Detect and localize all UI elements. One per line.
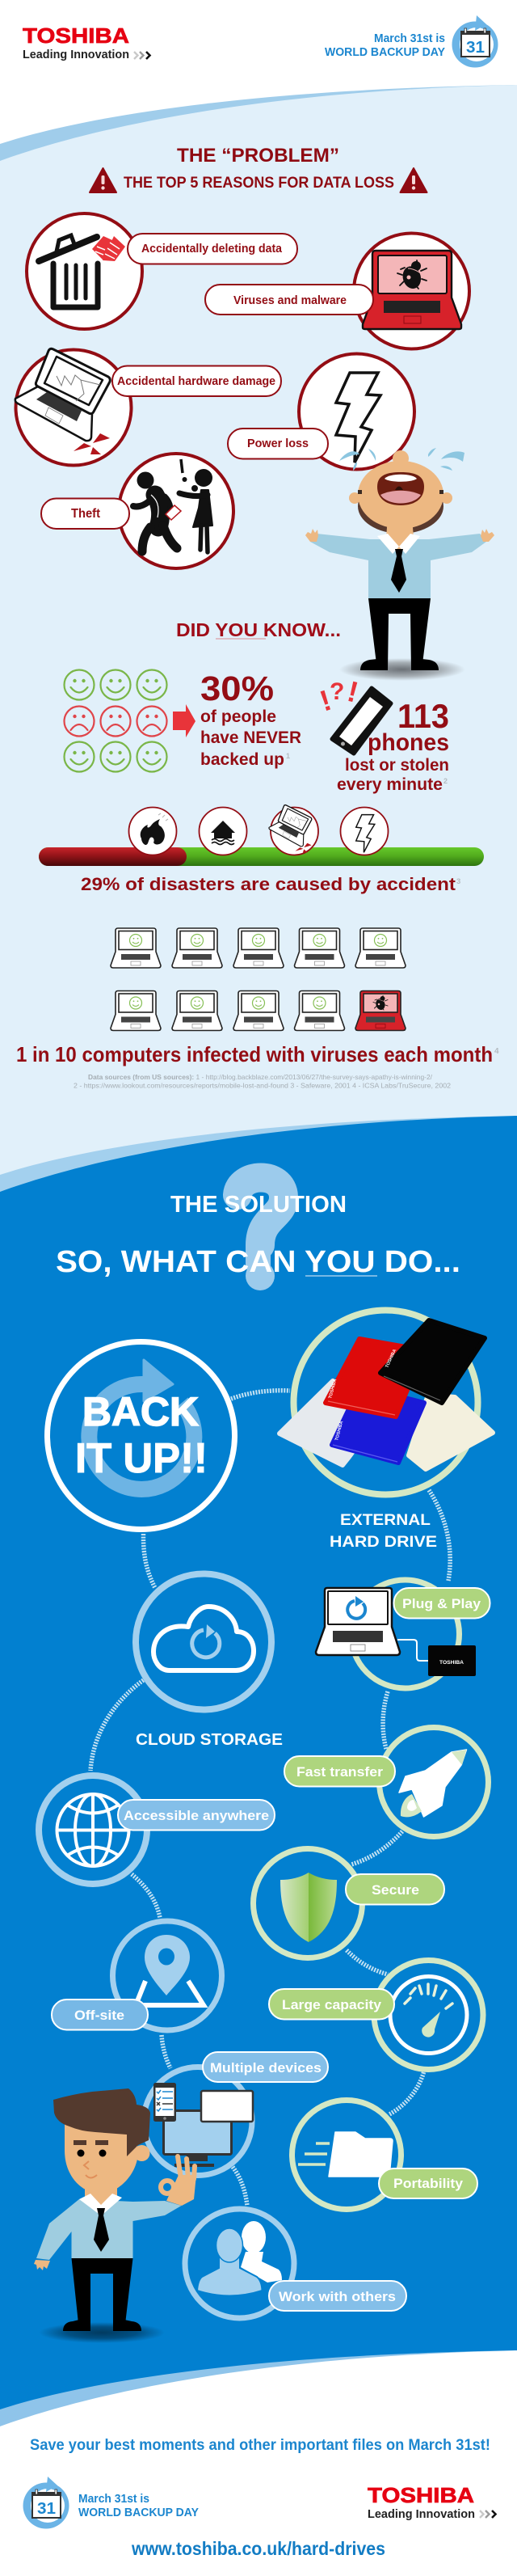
heading: did you know: DID YOU KNOW... — [176, 619, 341, 640]
label: portability: Portability — [393, 2176, 464, 2191]
icon: rocket — [399, 1750, 467, 1817]
label: theft: Theft — [71, 507, 100, 521]
header: Toshiba logo: TOSHIBA — [23, 23, 129, 48]
panel: back it up: BACK — [82, 1389, 199, 1434]
background: white footer section — [0, 2350, 517, 2576]
panel: multiple devices — [144, 2052, 328, 2175]
icon: shield — [280, 1873, 337, 1942]
footer icon: calendar 31 with backup arrow: 31 — [37, 2500, 56, 2518]
label: accidental hardware damage — [112, 365, 281, 396]
stat: 1 in 10 computers infected: 1 in 10 computers infected with viruses each month — [16, 1042, 493, 1066]
footer: world backup day text: March 31st is — [78, 2493, 149, 2506]
stat: 113 phones lost or stolen: 113 — [397, 697, 449, 735]
stat: 30% never backed up: of people — [200, 707, 276, 726]
footer: Toshiba logo: Leading Innovation — [368, 2508, 475, 2521]
chart: 3 in 9 smiley faces — [65, 669, 166, 771]
label: theft — [41, 498, 129, 529]
background: blue solution section — [0, 1116, 517, 2426]
label: accessible anywhere — [118, 1800, 275, 1831]
panel: cloud storage: CLOUD STORAGE — [136, 1730, 283, 1749]
text: data sources: 2 - https://www.lookout.com/resources/reports/mobile-lost-and-found 3 - Safeware, 2001 4 - ICSA Labs/TruSecure, 2002 — [74, 1082, 451, 1090]
icon: damaged laptop — [269, 805, 318, 855]
illustration: crying man — [305, 448, 494, 681]
icon: stack of hard drives: TOSHIBA — [328, 1379, 338, 1400]
icon: infected laptop small — [355, 991, 406, 1030]
label: off-site: Off-site — [74, 2008, 124, 2023]
heading: top 5 reasons for data loss — [90, 168, 427, 192]
header: Toshiba logo: Leading Innovation — [23, 49, 129, 61]
icon: phone with !?!: ? — [330, 678, 344, 705]
icon: flooded house — [199, 807, 247, 855]
icon: trash can — [39, 235, 125, 307]
icon: moving folder — [298, 2132, 393, 2177]
label: secure: Secure — [372, 1882, 419, 1898]
icon: question mark — [237, 1177, 284, 1290]
icon: calendar 31 with backup arrow: 31 — [466, 39, 485, 57]
icon: gauge — [390, 1976, 467, 2054]
text: data sources: Data sources (from US sources): 1 - http://blog.backblaze.com/2013/06/27/the-survey-says-apathy-is-winning-2/ — [88, 1073, 433, 1081]
stat: 29 percent of disasters: 3 — [456, 877, 460, 886]
footer: Toshiba logo: TOSHIBA — [368, 2483, 474, 2507]
icon: fire — [129, 807, 176, 855]
label: fast transfer — [284, 1756, 395, 1787]
panel: external hard drive — [280, 1310, 493, 1551]
icon: stack of hard drives: TOSHIBA — [385, 1349, 397, 1369]
label: large capacity: Large capacity — [282, 1997, 382, 2012]
label: multiple devices — [203, 2052, 328, 2082]
panel: external hard drive: HARD DRIVE — [330, 1534, 437, 1551]
panel: external hard drive: EXTERNAL — [340, 1512, 431, 1529]
icon: OK hand — [161, 2156, 196, 2206]
header: Toshiba logo — [23, 23, 150, 61]
icon: crying mouth — [377, 472, 424, 505]
connector lines — [90, 1391, 450, 2206]
icon: two people — [197, 2221, 282, 2296]
stat: 30% never backed up: 1 — [286, 752, 290, 760]
label: power loss: Power loss — [247, 437, 309, 450]
icon: phone monitor tablet — [153, 2083, 253, 2167]
panel: power loss — [228, 354, 414, 469]
heading: the solution: THE SOLUTION — [170, 1192, 347, 1218]
label: plug and play: Plug & Play — [402, 1596, 481, 1611]
header: world backup day text: March 31st is — [374, 32, 445, 45]
panel: fast transfer — [284, 1727, 488, 1837]
text: data sources — [74, 1073, 451, 1090]
label: accidentally deleting data — [128, 234, 297, 264]
icon: power cut — [341, 807, 388, 855]
label: accessible anywhere: Accessible anywhere — [124, 1808, 269, 1823]
header: world backup day text: WORLD BACKUP DAY — [325, 46, 445, 59]
header: world backup day text — [325, 32, 445, 59]
panel: accidental hardware damage — [15, 348, 281, 466]
stat: 113 phones lost or stolen — [337, 697, 449, 794]
label: viruses and malware — [205, 285, 373, 315]
panel: theft — [41, 454, 233, 568]
label: fast transfer: Fast transfer — [296, 1764, 383, 1780]
stat: 30% never backed up — [200, 669, 301, 769]
icon: red arrow — [173, 704, 195, 737]
icon: circular backup arrow — [89, 1360, 194, 1489]
stat: 113 phones lost or stolen: every minute — [337, 775, 443, 794]
panel: secure — [254, 1848, 444, 1958]
icon: globe — [57, 1794, 129, 1866]
icon: phone with !?!: ! — [316, 683, 335, 718]
panel: plug and play — [316, 1580, 490, 1688]
illustration: man making OK gesture — [34, 2088, 196, 2343]
footer: website url: www.toshiba.co.uk/hard-drives — [131, 2538, 385, 2559]
label: secure — [346, 1874, 444, 1905]
label: accidentally deleting data: Accidentally deleting data — [141, 242, 283, 255]
stat: 1 in 10 computers infected: 4 — [494, 1047, 499, 1056]
stat: 30% never backed up: 30% — [200, 669, 274, 708]
icon: thief and victim — [133, 459, 212, 552]
label: viruses and malware: Viruses and malware — [233, 293, 347, 307]
stat: 113 phones lost or stolen: phones — [368, 729, 449, 756]
stat: 113 phones lost or stolen: lost or stolen — [345, 756, 449, 775]
stat: 30% never backed up: have NEVER — [200, 728, 301, 747]
footer: Toshiba logo — [368, 2483, 496, 2521]
stat: 113 phones lost or stolen: 2 — [443, 777, 448, 785]
heading: so what can you do: SO, WHAT CAN YOU DO... — [56, 1245, 460, 1279]
stat: 29 percent of disasters: 29% of disasters are caused by accident — [81, 874, 456, 894]
panel: viruses and malware — [205, 233, 469, 349]
panel: accessible anywhere — [39, 1776, 275, 1884]
panel: back it up: IT UP!! — [75, 1435, 208, 1482]
panel: portability — [292, 2101, 477, 2209]
footer: world backup day text: WORLD BACKUP DAY — [78, 2506, 199, 2519]
icon: infected laptop — [363, 251, 461, 329]
icon: location pin — [136, 1935, 204, 2005]
heading: the problem: THE “PROBLEM” — [177, 145, 339, 167]
label: plug and play — [394, 1588, 490, 1619]
chart: 29 percent progress bar — [39, 805, 484, 866]
background: light blue problem section — [0, 85, 517, 1213]
footer icon: calendar 31 with backup arrow — [23, 2477, 69, 2529]
icon: laptop connected to drive — [316, 1588, 476, 1676]
heading: top 5 reasons for data loss: THE TOP 5 REASONS FOR DATA LOSS — [124, 174, 394, 192]
label: portability — [379, 2168, 477, 2198]
icon: broken laptop — [15, 348, 110, 454]
icon: cloud with backup arrow — [153, 1607, 254, 1670]
panel: accidentally deleting data — [27, 213, 297, 329]
icon: calendar 31 with backup arrow — [452, 15, 498, 68]
label: power loss — [228, 429, 328, 459]
panel: off-site — [52, 1921, 221, 2030]
label: large capacity — [269, 1989, 394, 2020]
chart: 1 in 10 laptops — [111, 928, 406, 1030]
icon: phone with !?! — [316, 674, 391, 754]
panel: work with others — [185, 2209, 406, 2318]
panel: back it up — [47, 1342, 234, 1530]
footer: save your best moments: Save your best moments and other important files on March 31st! — [30, 2436, 490, 2454]
label: work with others: Work with others — [279, 2289, 396, 2304]
icon: laptop connected to drive: TOSHIBA — [439, 1660, 464, 1666]
icon: lightning bolt — [336, 373, 380, 462]
panel: large capacity — [269, 1960, 483, 2070]
stat: 30% never backed up: backed up — [200, 750, 284, 769]
panel: cloud storage — [136, 1573, 283, 1749]
icon: stack of hard drives: TOSHIBA — [334, 1421, 344, 1442]
label: accidental hardware damage: Accidental hardware damage — [117, 374, 275, 388]
icon: phone with !?!: ! — [344, 674, 362, 709]
label: work with others — [269, 2281, 406, 2311]
icon: stack of hard drives — [280, 1320, 493, 1469]
icon: tears — [339, 448, 464, 471]
label: off-site — [52, 2000, 148, 2029]
label: multiple devices: Multiple devices — [210, 2060, 322, 2076]
footer: world backup day text — [78, 2493, 199, 2519]
